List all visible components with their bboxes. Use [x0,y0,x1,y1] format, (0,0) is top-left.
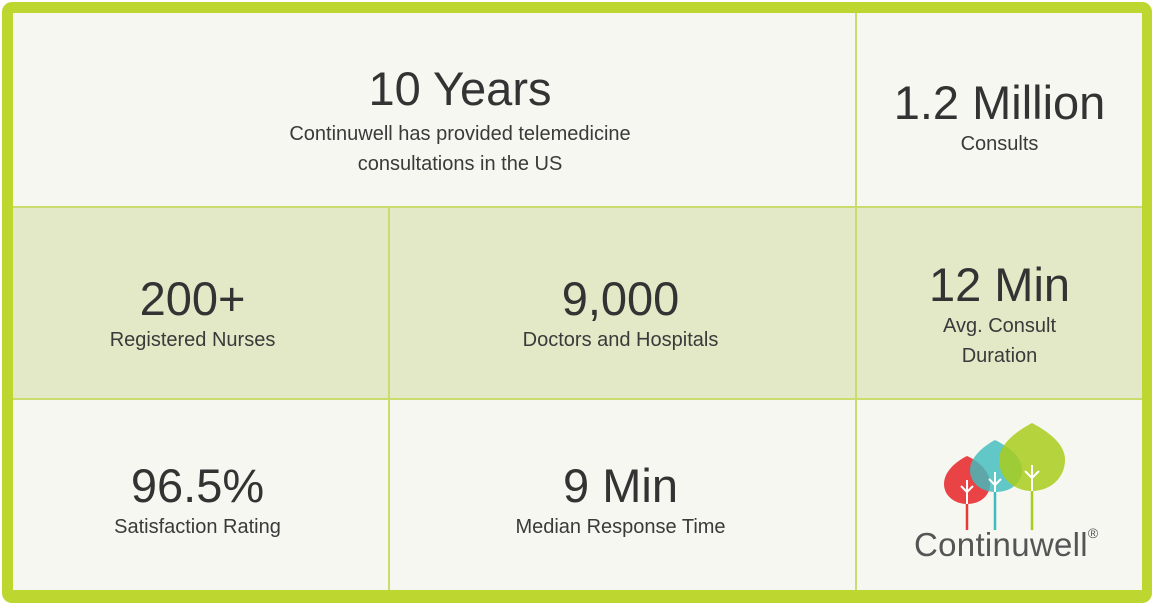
panel: 1.2 million: Consults [961,133,1038,155]
panel: 10 years: 10 Years [369,62,551,115]
panel: nurses: 200+ [140,272,245,325]
panel: doctors: 9,000 [562,272,679,325]
panel: consult duration: Duration [962,345,1037,367]
panel: 1.2 million [894,76,1105,155]
panel: response time: Median Response Time [515,516,726,538]
panel: 1.2 million: 1.2 Million [894,76,1105,129]
panel: consult duration: Avg. Consult [943,315,1056,337]
panel: 10 years: consultations in the US [358,153,562,175]
panel: consult duration: 12 Min [929,258,1070,311]
panel: response time [515,459,726,538]
panel: satisfaction [114,459,281,538]
panel: consult duration [929,258,1070,367]
panel: 10 years: Continuwell has provided telemedicine [289,123,631,145]
panel: nurses: Registered Nurses [110,329,275,351]
logo [914,423,1099,563]
panel: 10 years [289,62,631,175]
panel: satisfaction: Satisfaction Rating [114,516,281,538]
panel: doctors: Doctors and Hospitals [523,329,718,351]
logo: Continuwell® [914,525,1099,563]
panel: response time: 9 Min [563,459,678,512]
panel: satisfaction: 96.5% [131,459,264,512]
panel: nurses [110,272,275,351]
panel: doctors [523,272,718,351]
